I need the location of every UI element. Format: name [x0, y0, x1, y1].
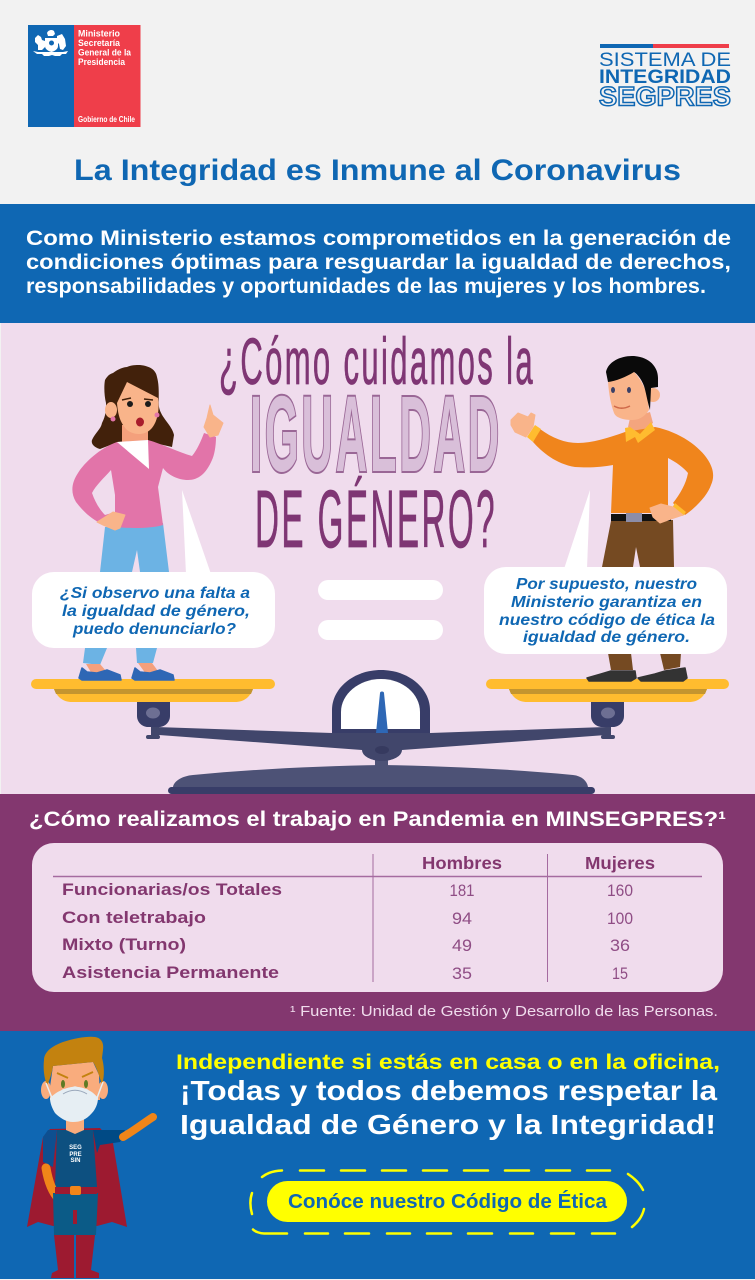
panel: commitment statement: condiciones óptimas para resguardar la igualdad de derechos, [26, 251, 731, 274]
data table: 15 [612, 964, 628, 983]
data table: 94 [452, 909, 472, 928]
button: Código de Ética [250, 1170, 644, 1234]
logo: Sistema de Integridad Segpres: SEGPRES [599, 82, 731, 112]
logo: Sistema de Integridad Segpres [599, 44, 731, 112]
speech bubble: man [484, 490, 727, 654]
data table: 160 [607, 881, 633, 900]
logo: Gobierno de Chile: Secretaría [78, 38, 121, 48]
panel: commitment statement: Como Ministerio estamos comprometidos en la generación de [26, 227, 731, 250]
data table: Hombres [422, 853, 502, 873]
speech bubble: woman: la igualdad de género, [62, 603, 250, 620]
speech bubble: woman [32, 490, 275, 648]
illustration: masked superhero: SIN [70, 1158, 81, 1164]
button: Código de Ética: Conóce nuestro Código de Ética [288, 1190, 608, 1213]
speech bubble: man: nuestro código de ética la [499, 612, 715, 629]
speech bubble: man: igualdad de género. [523, 629, 690, 646]
right pan [486, 679, 729, 739]
closing message: Independiente si estás en casa o en la oficina, [176, 1051, 720, 1074]
logo: Gobierno de Chile [28, 25, 140, 127]
closing message: Igualdad de Género y la Integridad! [180, 1109, 716, 1140]
panel: gender equality illustration [1, 323, 755, 794]
data table [32, 843, 723, 992]
gauge [332, 670, 430, 733]
beam and pivot [156, 727, 606, 766]
title: La Integridad es Inmune al Coronavirus [74, 154, 681, 187]
illustration: balance scale [31, 670, 729, 794]
table heading: ¿Cómo realizamos el trabajo en Pandemia en MINSEGPRES?¹ [29, 808, 726, 831]
closing message: ¡Todas y todos debemos respetar la [180, 1075, 717, 1106]
data table: Mujeres [585, 853, 655, 873]
illustration: masked superhero: PRE [69, 1152, 82, 1158]
illustration: man [511, 356, 713, 681]
data table: Con teletrabajo [62, 908, 206, 927]
speech bubble: woman: ¿Si observo una falta a [60, 585, 250, 602]
data table: 36 [610, 936, 630, 955]
speech bubble: woman: puedo denunciarlo? [72, 621, 237, 638]
illustration: masked superhero [27, 1037, 153, 1278]
base [168, 765, 595, 794]
illustration: woman [72, 365, 223, 680]
logo: Sistema de Integridad Segpres: INTEGRIDAD [599, 66, 731, 88]
data table: 100 [607, 909, 633, 928]
panel: commitment statement [0, 204, 755, 323]
closing message [176, 1051, 720, 1140]
data table: 35 [452, 964, 472, 983]
data table: Asistencia Permanente [62, 963, 279, 982]
logo: Gobierno de Chile: Ministerio [78, 28, 120, 38]
logo: Gobierno de Chile: Gobierno de Chile [78, 115, 135, 124]
data table: Funcionarias/os Totales [62, 880, 282, 899]
logo: Gobierno de Chile: Presidencia [78, 57, 126, 67]
logo: Sistema de Integridad Segpres: SISTEMA DE [599, 49, 731, 71]
illustration: masked superhero: SEG [69, 1145, 82, 1151]
panel: commitment statement: responsabilidades y oportunidades de las mujeres y los hombres. [26, 275, 706, 298]
data table: 181 [450, 881, 474, 900]
logo: Gobierno de Chile: General de la [78, 48, 132, 58]
panel: call to action [0, 1031, 755, 1279]
panel: pandemic work table [0, 794, 755, 1031]
speech bubble: man: Por supuesto, nuestro [516, 576, 697, 593]
speech bubble: man: Ministerio garantiza en [511, 594, 702, 611]
icon: coat of arms [33, 30, 68, 56]
data table: Mixto (Turno) [62, 935, 186, 954]
footnote: ¹ Fuente: Unidad de Gestión y Desarrollo de las Personas. [290, 1004, 718, 1020]
heading: ¿Cómo cuidamos la igualdad de género? [219, 324, 535, 565]
left pan [31, 679, 275, 739]
data table: 49 [452, 936, 472, 955]
empty pill placeholders [318, 580, 443, 640]
